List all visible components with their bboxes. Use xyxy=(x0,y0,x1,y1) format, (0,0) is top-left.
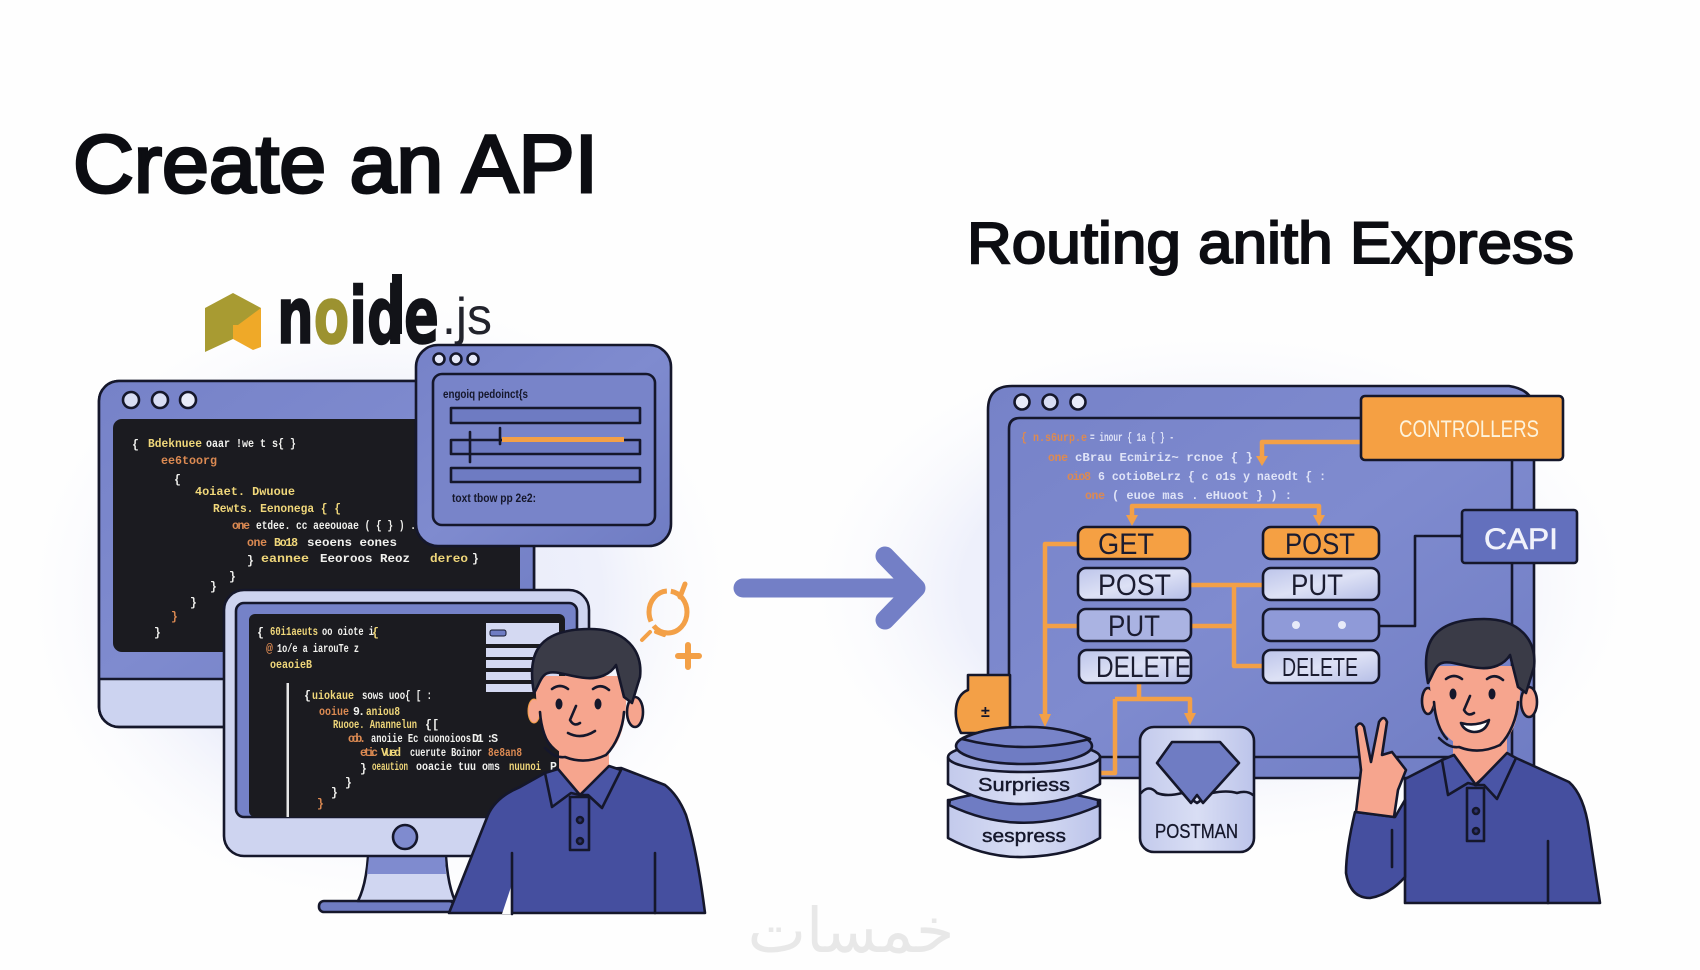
code listing: front monitor: 1o/e a iarouTe z xyxy=(277,643,359,656)
code listing: back monitor: eannee xyxy=(261,553,309,566)
head xyxy=(528,629,643,761)
connector: controllers to code xyxy=(1256,442,1360,466)
window footer text: toxt tbow pp 2e2: xyxy=(452,493,536,505)
code listing: front monitor: P xyxy=(550,761,557,774)
form bars xyxy=(451,408,640,482)
code listing: back monitor: etdee. cc aeeouoae ( { } ) . xyxy=(256,520,416,533)
code listing: front monitor: { xyxy=(372,627,379,640)
route button: POST right xyxy=(1263,527,1379,561)
code listing: front monitor: } xyxy=(360,763,367,776)
code listing: front monitor: oeaution xyxy=(372,761,408,774)
postman card xyxy=(1140,727,1254,852)
code listing: back monitor: } xyxy=(171,611,178,624)
route button: PUT right xyxy=(1263,568,1379,602)
database label: top: Surpriess xyxy=(978,775,1070,795)
code listing: back monitor: } xyxy=(247,555,254,568)
window heading text: engoiq pedoinct{s xyxy=(443,389,528,401)
icon: orange gear and plus xyxy=(642,584,699,667)
code listing: back monitor xyxy=(132,438,479,640)
code listing: back monitor: { xyxy=(132,439,139,452)
background glow: left xyxy=(10,280,750,920)
code listing: front monitor: ooiue xyxy=(319,706,349,719)
code listing: front monitor: ooacie tuu oms xyxy=(416,761,500,774)
code listing: front monitor: anoiie Ec cuonoioos xyxy=(371,733,471,746)
code listing: back monitor: 4oiaet. Dwuoue xyxy=(195,486,295,499)
panel: express routing window xyxy=(988,386,1534,778)
connectors: route lines xyxy=(1039,532,1468,773)
code listing: front monitor: 9. xyxy=(353,706,365,719)
code listing: back monitor: } xyxy=(154,627,161,640)
code listing: front monitor: nuunoi xyxy=(509,761,541,774)
code listing: routing window: ( euoe mas . eHuoot } ) : xyxy=(1112,490,1292,503)
node.js logo: noide xyxy=(277,272,439,362)
code listing: back monitor: Bdeknuee xyxy=(148,438,202,451)
code listing: front monitor: { [ xyxy=(425,719,439,732)
code listing: front monitor: } xyxy=(345,777,352,790)
code listing: routing window: oio8 xyxy=(1067,471,1091,484)
route button: PUT left xyxy=(1078,609,1191,643)
code listing: back monitor: Eeoroos Reoz xyxy=(320,553,410,566)
code listing: front monitor: } xyxy=(317,798,324,811)
code listing: front monitor: @ xyxy=(266,643,273,656)
code listing: front monitor: oeaoieB xyxy=(270,659,312,672)
title: Create an API: Create an API xyxy=(73,119,598,210)
connector: split to GET and POST xyxy=(1126,506,1325,526)
code listing: front monitor: Vued xyxy=(381,747,401,760)
route button: PUT right: PUT xyxy=(1291,569,1343,602)
panel: floating browser window xyxy=(416,345,671,546)
icon: money bag: ± xyxy=(981,704,990,721)
code listing: back monitor: } xyxy=(210,581,217,594)
route button: DELETE left: DELETE xyxy=(1096,651,1191,684)
arrow xyxy=(743,556,916,620)
code listing: front monitor: aniou8 xyxy=(366,706,400,719)
code listing: front monitor: D1 :S xyxy=(472,733,498,746)
character: developer at right xyxy=(1346,619,1600,903)
code listing: front monitor: oob. xyxy=(348,733,366,746)
background glow: right xyxy=(790,320,1650,860)
database cylinder stack xyxy=(948,727,1100,857)
code listing: back monitor: { xyxy=(174,474,181,487)
code listing: routing window: { n.s6urp.e xyxy=(1021,432,1087,445)
code listing: back monitor: dereo xyxy=(430,553,468,566)
CAPI box: CAPI xyxy=(1484,523,1558,556)
hand: peace sign xyxy=(1356,718,1406,817)
title: Routing with Express: Routing anith Express xyxy=(967,211,1574,276)
code listing: back monitor: ee6toorg xyxy=(161,455,217,468)
code listing: back monitor: Rewts. Eenonega { { xyxy=(213,503,341,516)
head xyxy=(1422,619,1537,751)
code listing: routing window xyxy=(1021,432,1326,503)
route button: GET xyxy=(1078,527,1190,561)
code listing: back monitor: } xyxy=(472,553,479,566)
code listing: back monitor: one xyxy=(247,537,267,550)
code listing: front monitor xyxy=(257,626,557,817)
code listing: front monitor: cuerute Boinor xyxy=(410,747,482,760)
code listing: front monitor: } xyxy=(331,787,338,800)
controllers box xyxy=(1361,396,1563,460)
watermark: خمسات xyxy=(748,894,954,967)
code listing: back monitor: } xyxy=(229,571,236,584)
code listing: front monitor: etic xyxy=(360,747,378,760)
code listing: routing window: one xyxy=(1085,490,1105,503)
code listing: routing window: 6 cotioBeLrz { c o1s y naeodt { : xyxy=(1098,471,1326,484)
route button: POST right: POST xyxy=(1285,528,1355,561)
code listing: front monitor: { xyxy=(304,690,311,703)
icon: money bag xyxy=(956,675,1010,733)
code listing: routing window: = inour { 1a { } - xyxy=(1090,432,1174,445)
postman card: POSTMAN xyxy=(1155,821,1238,843)
route button: blank right xyxy=(1263,609,1379,641)
panel: front monitor with code xyxy=(224,590,589,912)
code listing: back monitor: oaar !we t s{ } xyxy=(206,438,296,451)
code listing: front monitor: 8e8an8 xyxy=(488,747,522,760)
controllers box: CONTROLLERS xyxy=(1399,416,1539,443)
character: developer at left xyxy=(449,629,705,914)
code listing: back monitor: seoens eones xyxy=(307,537,397,550)
code listing: routing window: one xyxy=(1048,452,1068,465)
code listing: front monitor: uiokaue xyxy=(312,690,354,703)
code listing: front monitor: oo oiote i xyxy=(322,626,374,639)
node.js logo: .js xyxy=(442,288,492,346)
route button: PUT left: PUT xyxy=(1108,610,1160,643)
database label: bottom: sespress xyxy=(982,826,1066,846)
mini form on screen xyxy=(486,623,559,692)
code listing: routing window: cBrau Ecmiriz~ rcnoe { } xyxy=(1075,452,1253,465)
code listing: back monitor: Bo18 xyxy=(274,537,298,550)
code listing: front monitor: Ruooe. Anannelun xyxy=(333,719,417,732)
code listing: front monitor: 60i1aeuts xyxy=(270,626,318,639)
code listing: back monitor: } xyxy=(190,597,197,610)
route button: DELETE left xyxy=(1079,650,1191,684)
route button: DELETE right: DELETE xyxy=(1282,652,1358,682)
code listing: front monitor: sows uoo{ [ : xyxy=(362,690,432,703)
CAPI box xyxy=(1462,510,1577,563)
code listing: front monitor: { xyxy=(257,627,264,640)
route button: POST left: POST xyxy=(1098,569,1171,602)
route button: GET: GET xyxy=(1098,528,1154,561)
code listing: back monitor: one xyxy=(232,520,250,533)
panel: back monitor with code xyxy=(99,381,534,727)
